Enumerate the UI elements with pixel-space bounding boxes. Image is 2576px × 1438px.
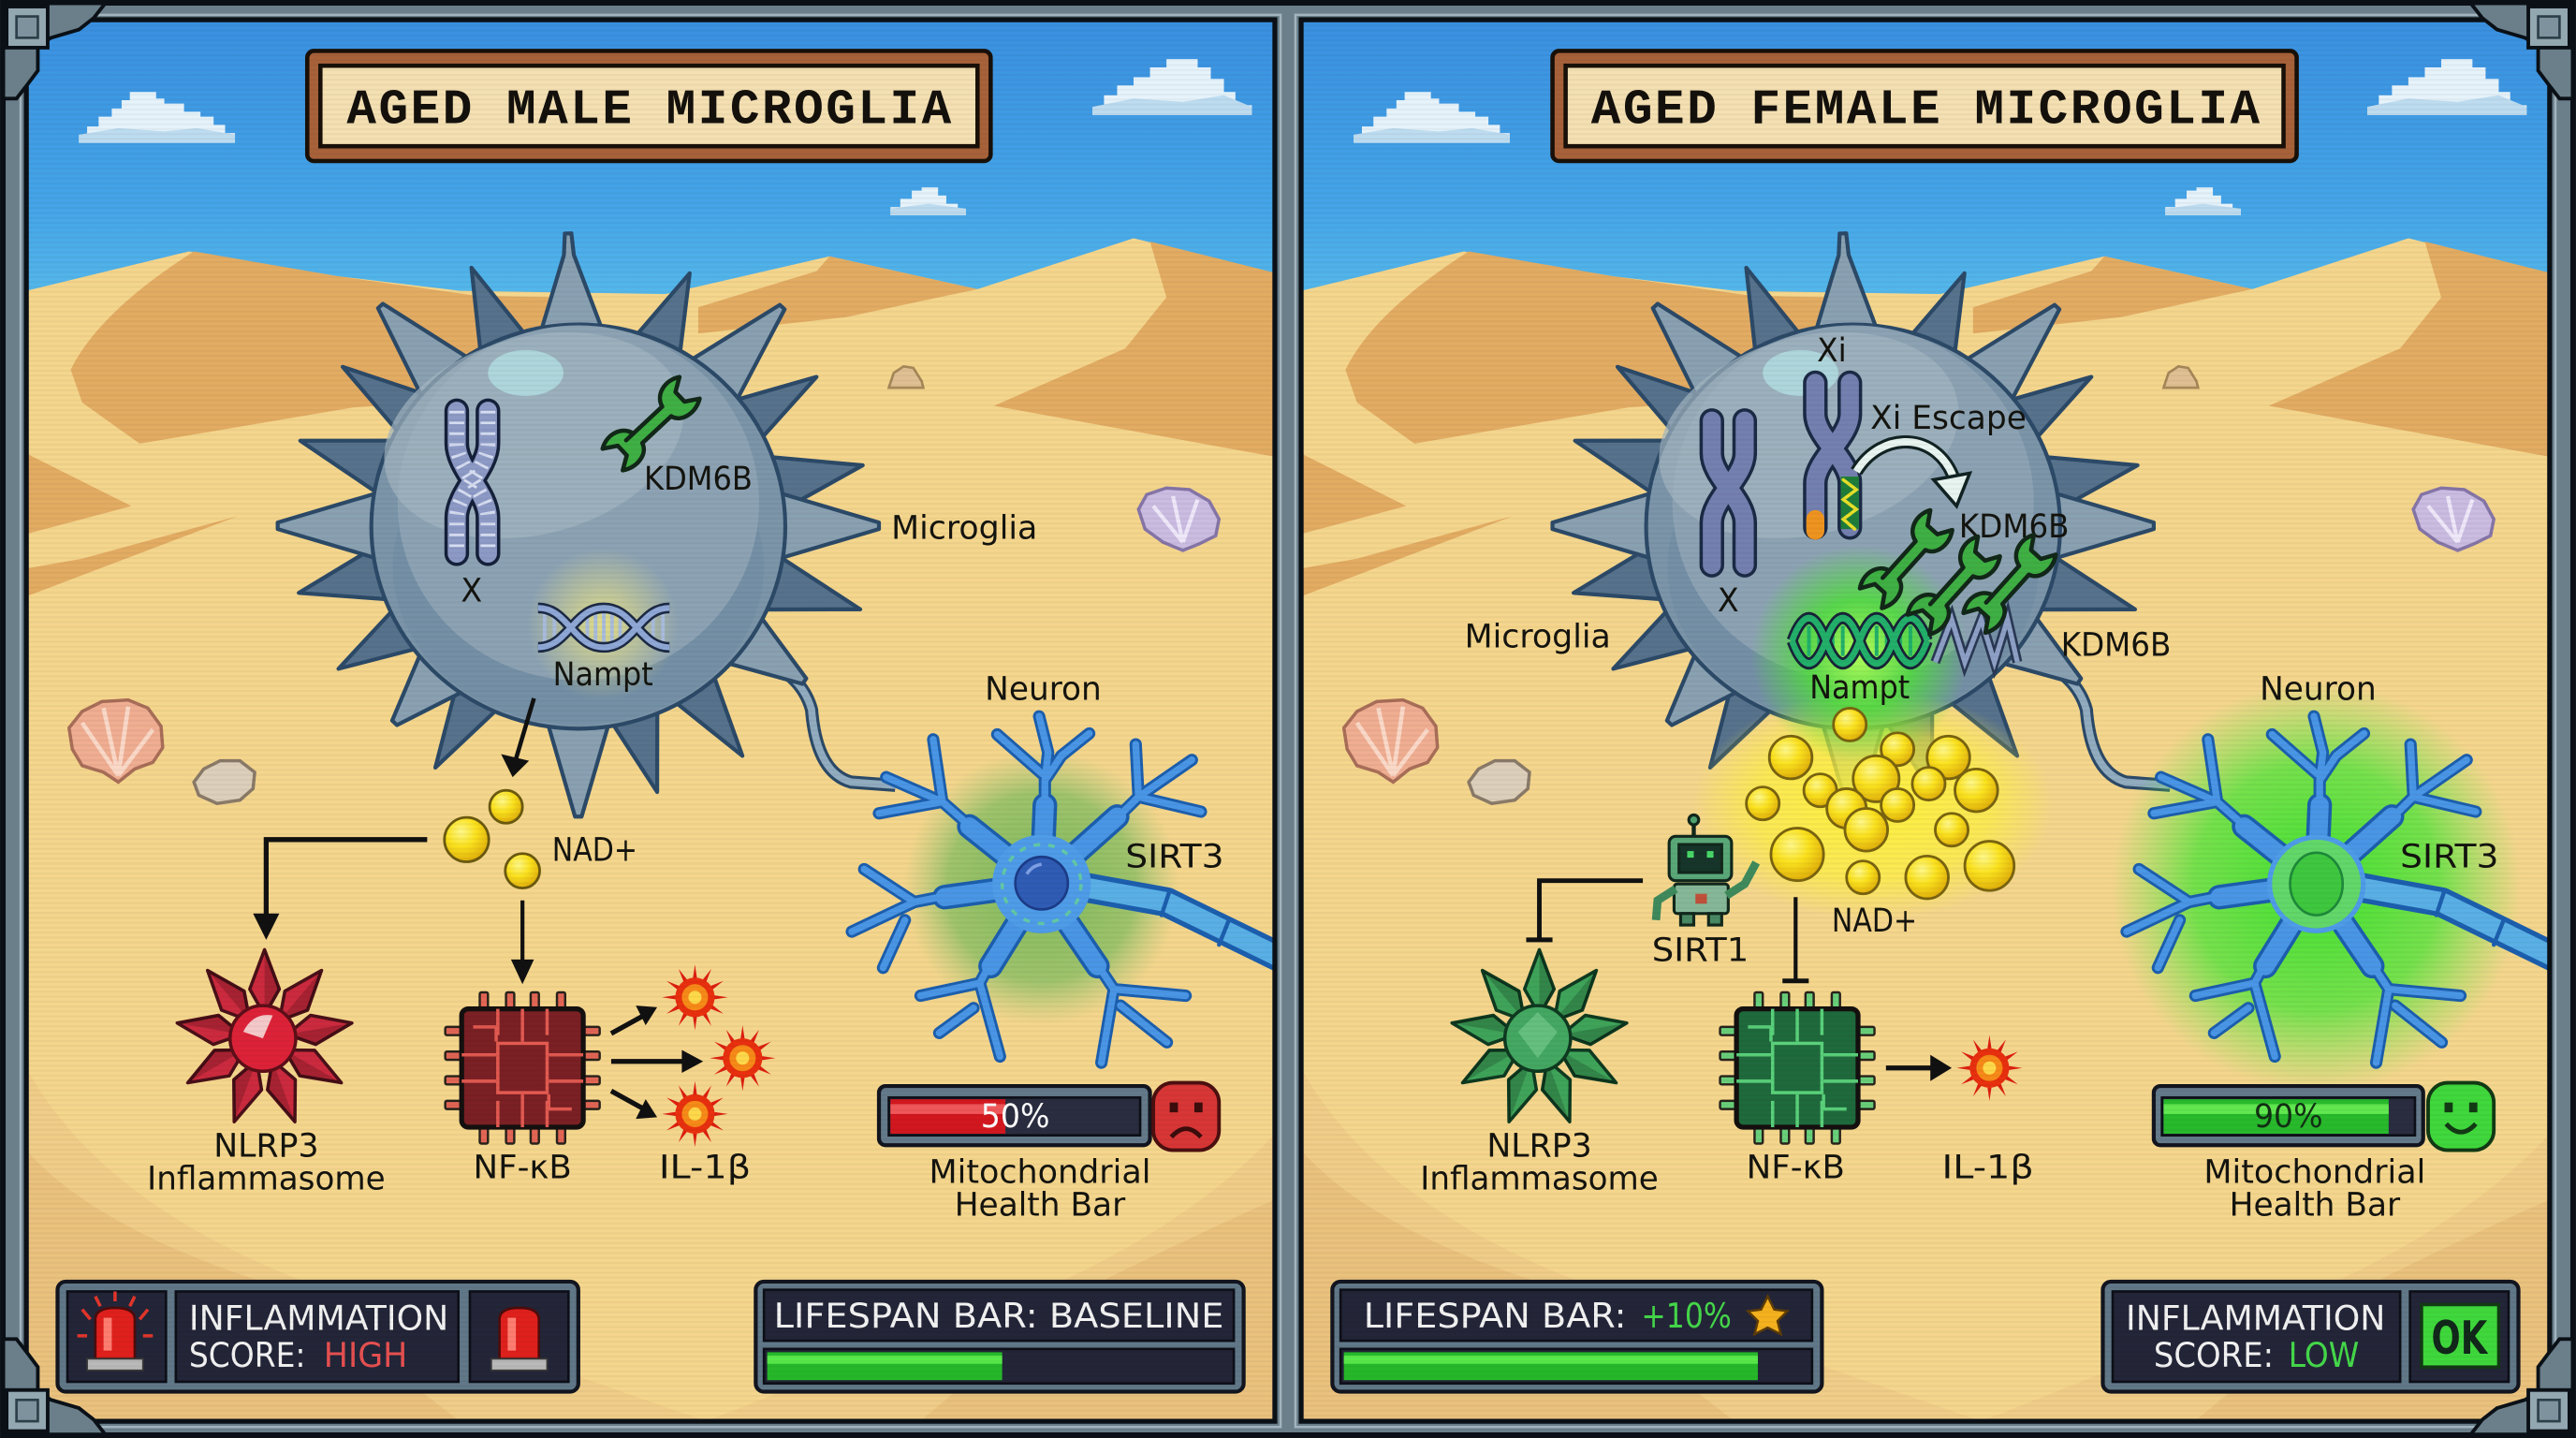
label: IL-1β: IL-1β [659,1148,751,1186]
label: Microglia: Microglia [891,509,1037,548]
neuron nucleus [1003,844,1081,923]
desert scenery: male panel [26,20,1275,1421]
label: Mitochondrial Health Bar: Health Bar [2230,1186,2401,1225]
chromosome X [1712,420,1745,565]
arrow: Nampt to NAD+ [501,698,534,777]
label: KDM6B upper: KDM6B [1959,507,2070,546]
icons: IL-1β bursts [662,964,775,1147]
label: Microglia: Microglia [1465,617,1611,655]
label: SIRT3: SIRT3 [2400,838,2498,876]
inflammation score HUD: low [2102,1282,2519,1392]
mitochondrial health bar 50% [879,1086,1150,1145]
title: aged male microglia: AGED MALE MICROGLIA [346,82,952,139]
text: inflammation score: INFLAMMATION [2126,1299,2385,1339]
label: KDM6B: KDM6B [644,460,753,498]
label: NLRP3 Inflammasome [1420,1127,1659,1198]
label: X: X [1718,581,1739,620]
inflammation score HUD: high [57,1282,578,1392]
text: inflammation score: INFLAMMATION [189,1299,448,1339]
neuron [852,716,1298,1063]
title: aged female microglia [1553,51,2297,161]
neuron glow [2111,682,2522,1093]
label: NLRP3 Inflammasome [147,1127,386,1198]
label: Neuron: Neuron [2260,670,2377,709]
icon: NF-kB chip red [446,992,600,1143]
microglia cell: male [278,232,896,816]
label: Xi: Xi [1817,331,1847,370]
icon: NLRP3 inflammasome green [1449,949,1630,1127]
lifespan bar HUD: +10% [1332,1282,1822,1392]
chromosome Xi with escape region [1815,383,1856,531]
desert scenery: female panel [1301,20,2550,1421]
text: inflammation score [189,1299,448,1375]
label: NAD+: NAD+ [1832,902,1917,940]
lifespan bar HUD: baseline [755,1282,1244,1392]
text: inflammation score [2126,1299,2385,1375]
panel: aged male microglia [26,20,1298,1421]
icon: siren with rays [78,1291,153,1371]
chromosome X [457,411,488,553]
inhibition line: SIRT1 to NLRP3 [1526,881,1643,940]
icon: IL-1β burst [1956,1035,2022,1101]
label: Mitochondrial Health Bar: Mitochondrial [929,1153,1150,1192]
microglia cell: female [1553,232,2170,816]
icon: NF-kB chip green [1720,992,1875,1143]
label: Mitochondrial Health Bar: Mitochondrial [2203,1153,2425,1192]
icons: three KDM6B wrenches [1857,507,2059,638]
icon: SIRT1 robot [1656,814,1756,925]
panel: aged female microglia [1301,20,2572,1421]
label: X: X [461,571,482,609]
text: inflammation score: SCORE: [2154,1335,2274,1375]
Nampt glow [527,549,679,700]
label: Mitochondrial Health Bar [2203,1153,2425,1225]
label: NAD+: NAD+ [552,831,637,870]
arrow: NF-kB to IL-1β [1886,1055,1952,1081]
neuron [2127,716,2572,1063]
label: Nampt: Nampt [553,655,653,694]
lifespan bar HUD: +10%: +10% [1641,1296,1732,1336]
icon: star [1748,1297,1788,1334]
title: aged male microglia [307,51,990,161]
label: NF-kB: NF-κB [474,1148,572,1186]
mitochondrial health bar 90%: 90% [2254,1097,2323,1136]
label: NLRP3 Inflammasome: Inflammasome [1420,1160,1659,1198]
mitochondrial health bar 90% [2154,1086,2423,1145]
icon: siren [491,1308,547,1371]
label: Mitochondrial Health Bar [929,1153,1150,1225]
lifespan bar HUD: baseline: LIFESPAN BAR: BASELINE [774,1296,1224,1336]
label: Neuron: Neuron [985,670,1102,709]
icon: OK badge: OK [2431,1311,2489,1365]
text: inflammation score: SCORE: [189,1335,305,1375]
label: Mitochondrial Health Bar: Health Bar [955,1186,1126,1225]
inhibition line: NAD+ to NF-kB [1782,897,1808,981]
arrows: NF-kB to IL-1β [611,1005,703,1119]
label: SIRT3: SIRT3 [1125,838,1224,876]
label: NLRP3 Inflammasome: Inflammasome [147,1160,386,1198]
text: inflammation score: LOW [2289,1335,2359,1375]
label: SIRT1: SIRT1 [1652,932,1749,970]
label: IL-1β: IL-1β [1942,1148,2034,1186]
NAD+ molecules: abundant [1747,708,2014,899]
icon: happy face [2428,1083,2494,1151]
icon: sad face [1153,1083,1219,1151]
icon: Nampt DNA [538,608,669,647]
neuron glow [903,749,1179,1025]
icon: NLRP3 inflammasome red [175,949,355,1127]
label: NLRP3 Inflammasome: NLRP3 [1486,1127,1592,1166]
lifespan bar HUD: +10%: LIFESPAN BAR: [1364,1296,1627,1336]
arrow: Xi escape [1856,442,1969,506]
label: KDM6B lower: KDM6B [2061,625,2171,664]
text: inflammation score: HIGH [324,1335,407,1375]
NAD+ molecules: low [445,790,540,888]
label: Nampt: Nampt [1809,668,1910,707]
Nampt green glow [1751,546,1969,762]
label: NF-kB: NF-κB [1747,1148,1845,1186]
label: Xi Escape: Xi Escape [1870,399,2027,437]
arrow: NAD+ to NLRP3 [253,840,427,940]
icon: Nampt DNA active [1792,618,1927,664]
arrow: NAD+ to NF-kB [511,901,534,984]
title: aged female microglia: AGED FEMALE MICROGLIA [1591,82,2261,139]
label: NLRP3 Inflammasome: NLRP3 [213,1127,319,1166]
mitochondrial health bar 50%: 50% [981,1097,1050,1136]
neuron soma and nucleus [2272,840,2361,929]
icon: condensed DNA segment [1935,620,2017,662]
NAD+ yellow glow [1692,690,2054,920]
icon: KDM6B wrench [600,374,703,474]
